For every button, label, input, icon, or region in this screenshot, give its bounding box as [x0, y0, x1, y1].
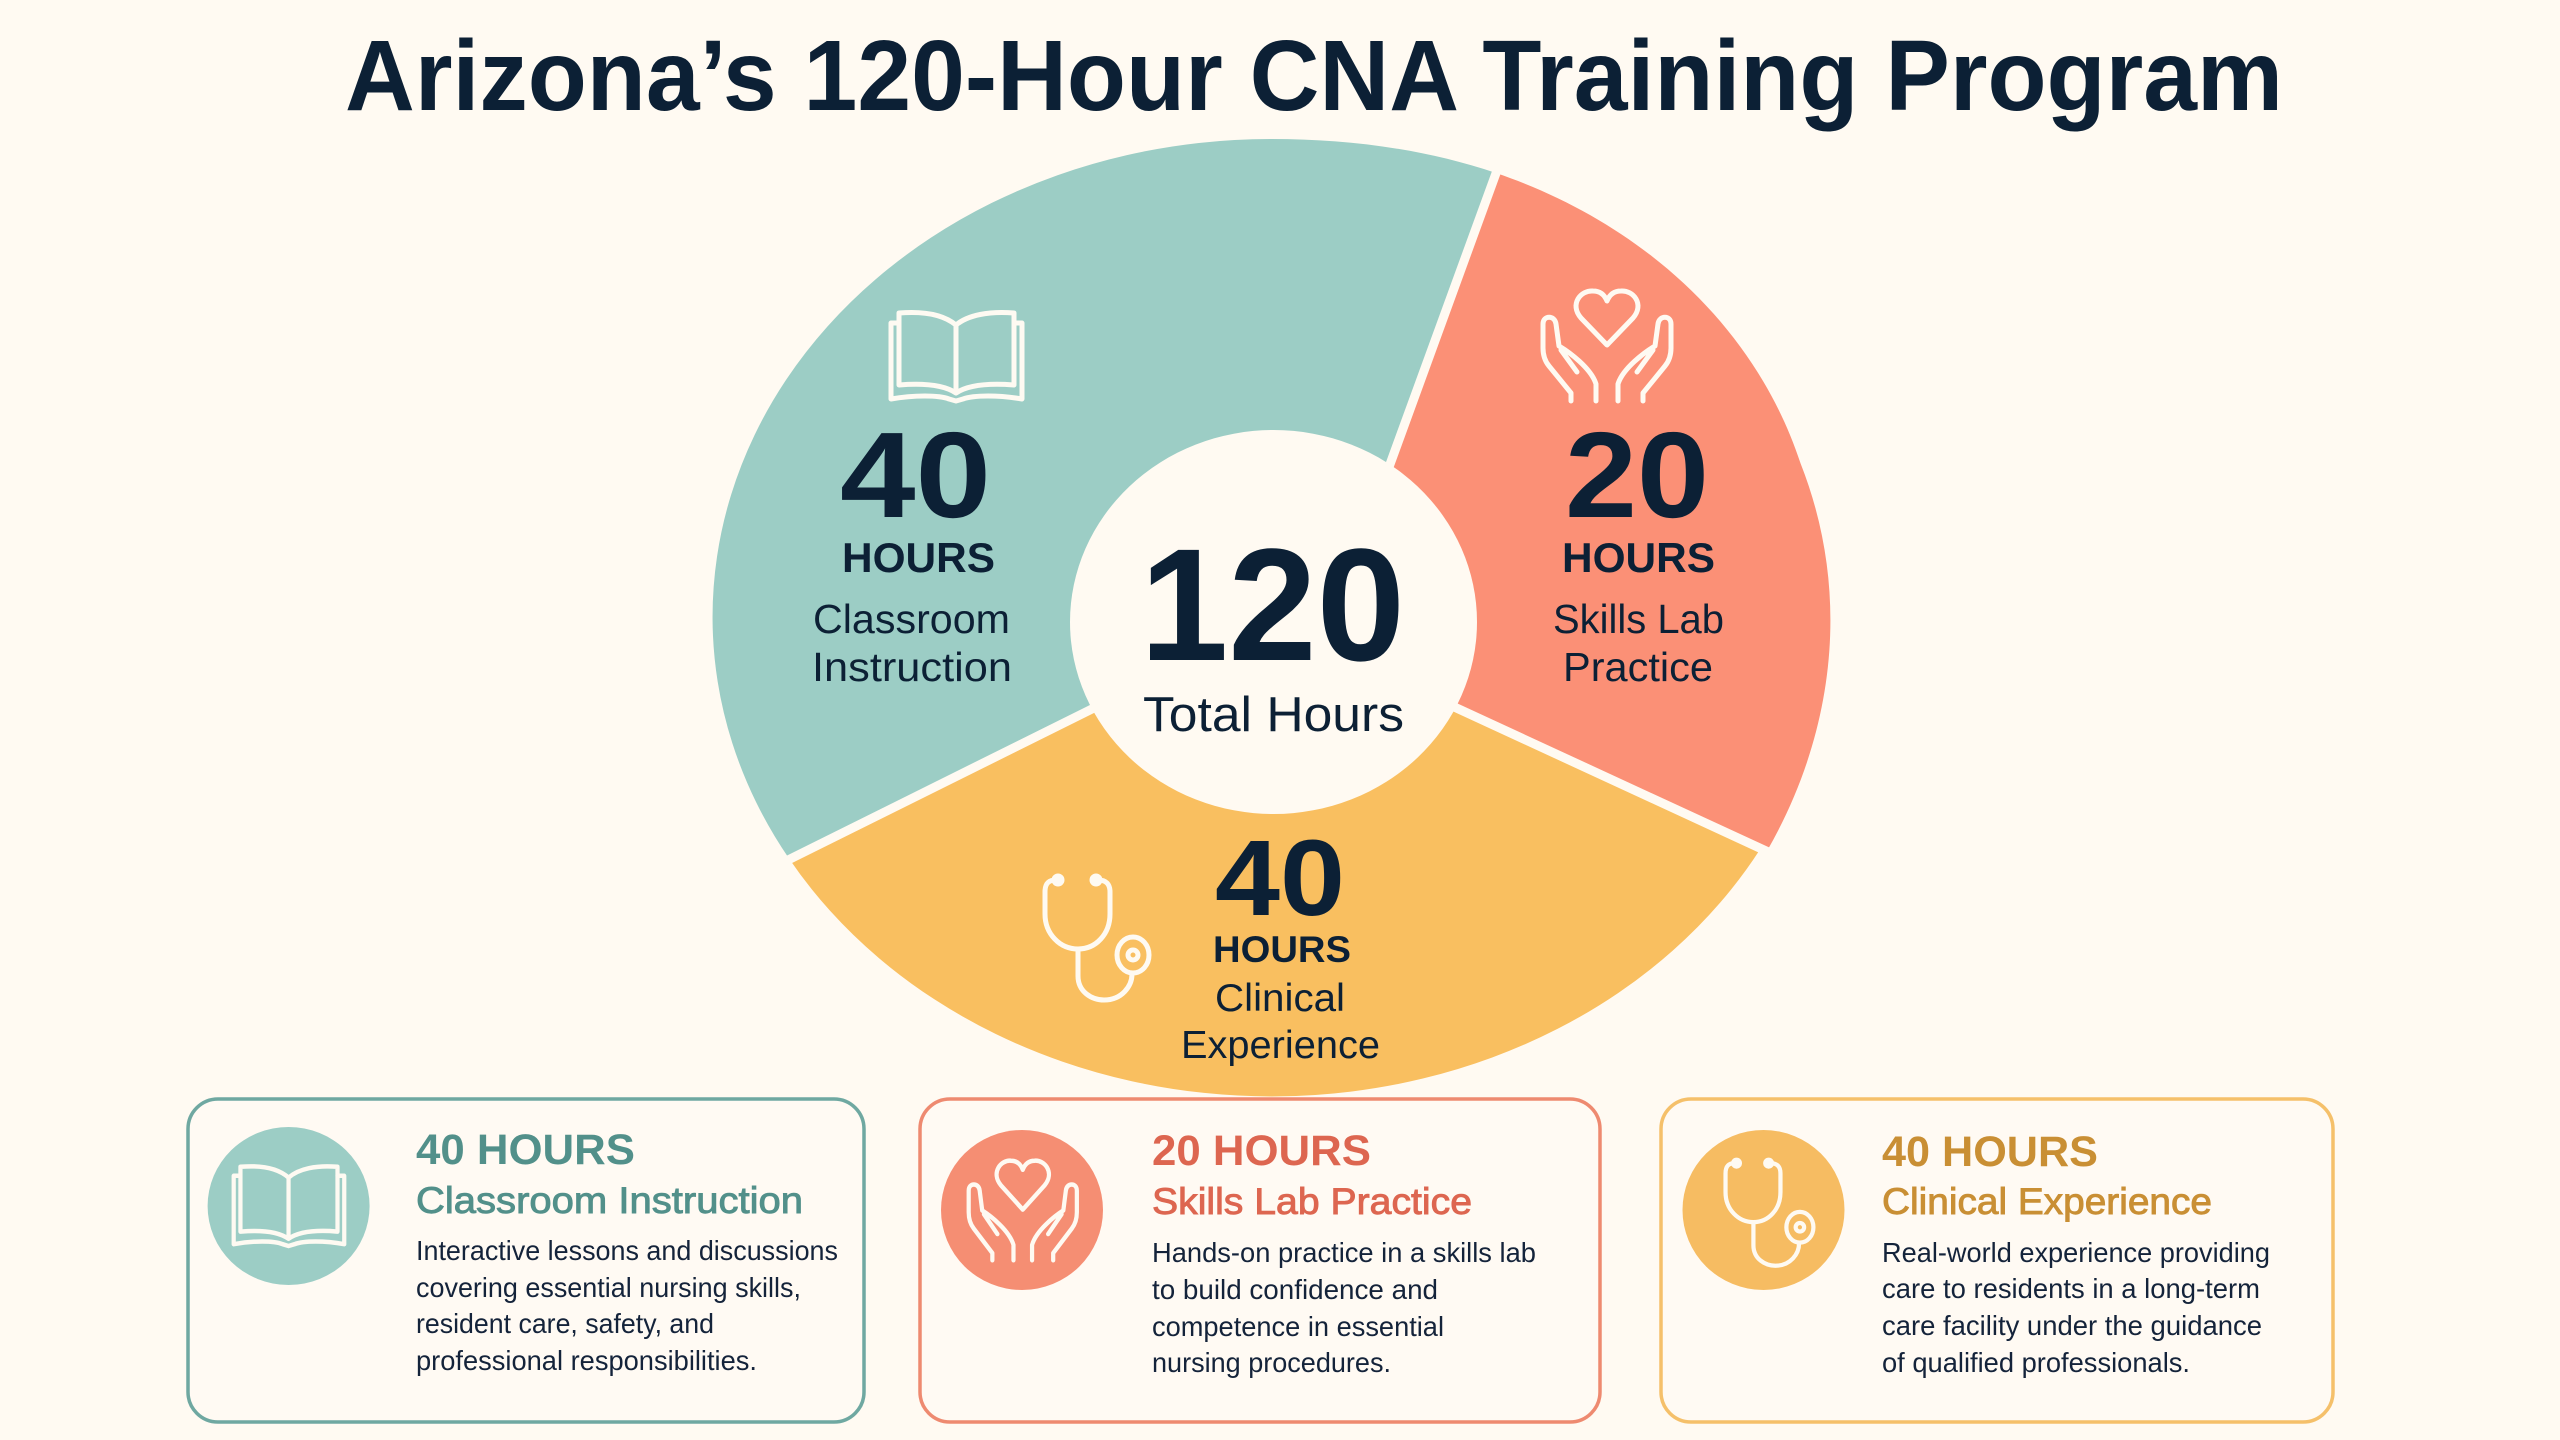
description: competence in essential — [1152, 1311, 1444, 1342]
description: Hands-on practice in a skills lab — [1152, 1237, 1536, 1268]
segment: clinical experience — [789, 622, 1767, 1096]
panel heading: Classroom Instruction — [416, 1180, 803, 1221]
description: nursing procedures. — [1152, 1347, 1391, 1378]
center hole — [1070, 430, 1477, 814]
unit: HOURS — [842, 534, 995, 581]
total label: Total Hours — [1143, 688, 1404, 742]
segment: skills lab practice — [1273, 173, 1830, 851]
name line 2: Practice — [1563, 644, 1713, 690]
icon badge: book — [208, 1127, 370, 1285]
card border — [188, 1099, 864, 1422]
center total — [1140, 515, 1405, 742]
hours heading: 40 HOURS — [1882, 1128, 2098, 1176]
icon badge: hands and heart — [941, 1130, 1103, 1290]
card border — [920, 1099, 1600, 1422]
unit: HOURS — [1562, 534, 1715, 581]
panel heading: Clinical Experience — [1882, 1181, 2212, 1222]
title: Arizona’s 120-Hour CNA Training Program — [345, 20, 2283, 132]
donut chart — [713, 139, 1830, 1096]
description: Interactive lessons and discussions — [416, 1235, 838, 1266]
icon: stethoscope — [1045, 876, 1149, 1000]
card border — [1661, 1099, 2333, 1422]
segment: classroom instruction — [713, 139, 1496, 858]
value: 20 — [1565, 407, 1709, 543]
panel heading: Skills Lab Practice — [1152, 1181, 1472, 1222]
icon badge: stethoscope — [1682, 1130, 1844, 1290]
description: resident care, safety, and — [416, 1308, 714, 1339]
hours heading: 20 HOURS — [1152, 1127, 1371, 1175]
total number: 120 — [1140, 515, 1405, 694]
segment label: clinical — [1045, 817, 1380, 1067]
icon: open book — [891, 312, 1022, 401]
value: 40 — [1215, 817, 1345, 938]
segment label: skills lab — [1543, 291, 1724, 690]
unit: HOURS — [1213, 929, 1351, 970]
description: covering essential nursing skills, — [416, 1272, 801, 1303]
description: care to residents in a long-term — [1882, 1273, 2260, 1304]
panel: classroom instruction — [188, 1099, 864, 1422]
description: of qualified professionals. — [1882, 1347, 2190, 1378]
segment label: classroom — [812, 312, 1022, 690]
description — [416, 1235, 838, 1376]
value: 40 — [840, 407, 991, 543]
description: professional responsibilities. — [416, 1345, 757, 1376]
description: care facility under the guidance — [1882, 1310, 2262, 1341]
description: Real-world experience providing — [1882, 1237, 2270, 1268]
panel: clinical experience — [1661, 1099, 2333, 1422]
description — [1152, 1237, 1536, 1378]
name line 2: Experience — [1181, 1024, 1380, 1067]
icon: hands holding heart — [1543, 291, 1671, 401]
description: to build confidence and — [1152, 1274, 1438, 1305]
name: Skills Lab — [1553, 596, 1724, 642]
name: Classroom — [813, 596, 1010, 642]
description — [1882, 1237, 2270, 1378]
name: Clinical — [1215, 977, 1345, 1020]
panel: skills lab practice — [920, 1099, 1600, 1422]
name line 2: Instruction — [812, 644, 1012, 690]
hours heading: 40 HOURS — [416, 1126, 635, 1174]
